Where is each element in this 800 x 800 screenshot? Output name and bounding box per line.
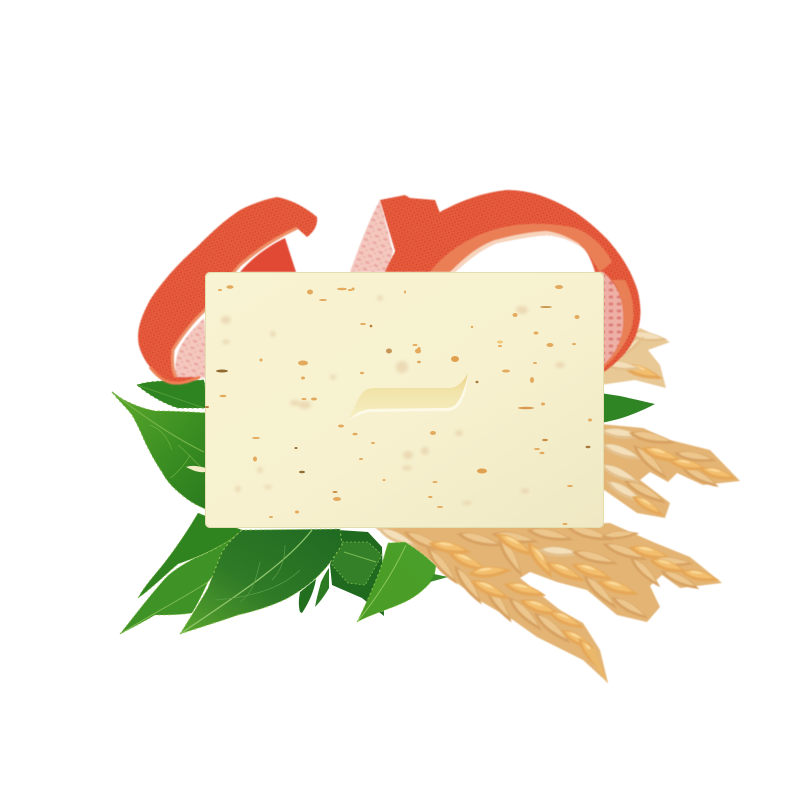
- soap bar: [205, 272, 604, 528]
- leaves: upper left: [112, 380, 208, 510]
- leaf: right of soap: [600, 393, 655, 423]
- leaves: lower cluster: [120, 513, 448, 634]
- grapefruit peel: right curl: [385, 190, 640, 372]
- soap speckles: [205, 285, 592, 525]
- grapefruit peel: left curl: [138, 197, 317, 383]
- grapefruit peel: centre curl: [350, 195, 440, 272]
- soap logo indent: [348, 373, 468, 421]
- wheat: upper right ears: [598, 328, 740, 520]
- soap faint blotches: [221, 296, 565, 505]
- wheat: lower right ears: [375, 523, 722, 684]
